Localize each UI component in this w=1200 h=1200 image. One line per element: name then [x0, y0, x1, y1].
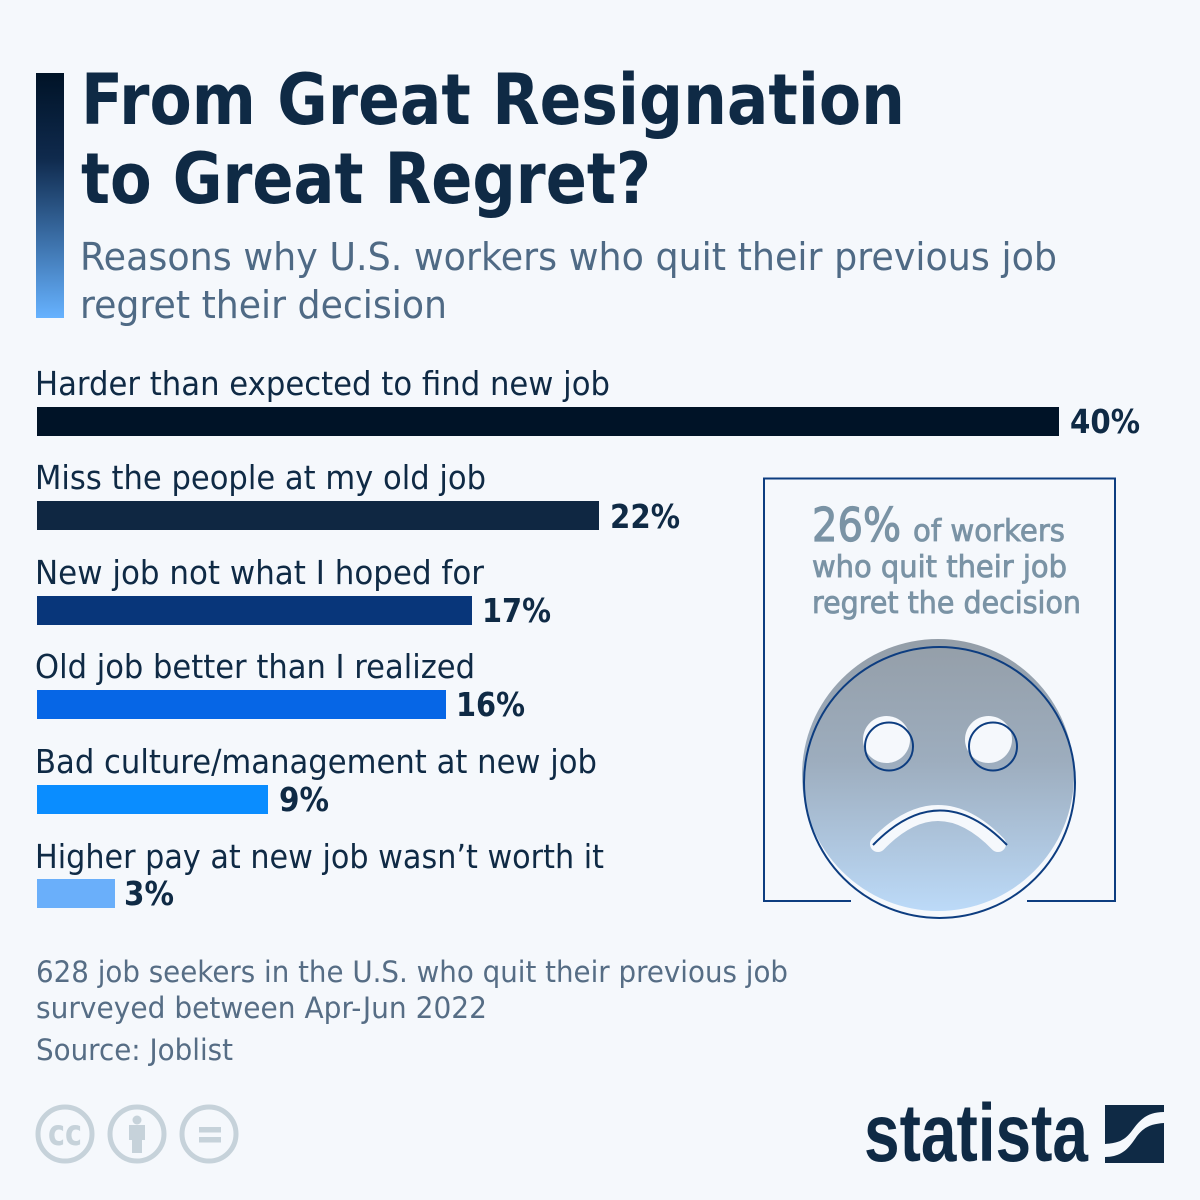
row: bad culture: 9%	[279, 780, 329, 819]
icon: cc license	[38, 1107, 92, 1161]
row: new job not what hoped: 17%	[482, 591, 551, 630]
row: higher pay: 3%	[124, 874, 174, 913]
callout text: who quit their job	[812, 550, 1067, 585]
title: to Great Regret?	[81, 138, 651, 220]
callout panel	[764, 478, 1115, 918]
row: new job not what hoped: New job not what I hoped for	[35, 554, 485, 592]
callout text: 26%	[812, 498, 901, 552]
row: miss the people	[35, 459, 680, 536]
accent bar	[36, 73, 64, 318]
row: higher pay	[35, 838, 604, 913]
row: miss the people: 22%	[610, 497, 680, 536]
logo mark	[1105, 1105, 1164, 1163]
logo wordmark: statista	[864, 1088, 1089, 1179]
icon: sad face	[802, 639, 1075, 918]
subtitle: regret their decision	[80, 283, 447, 327]
callout text: of workers	[913, 514, 1065, 549]
row: new job not what hoped	[35, 554, 551, 630]
row: old job better: Old job better than I realized	[35, 648, 475, 686]
title	[81, 59, 905, 220]
icon: attribution	[110, 1107, 164, 1161]
bar chart	[35, 365, 1140, 913]
footnote: 628 job seekers in the U.S. who quit their previous job	[36, 955, 788, 989]
row: bad culture: Bad culture/management at new job	[35, 743, 597, 781]
row: miss the people: Miss the people at my old job	[35, 459, 486, 497]
footnote: Source: Joblist	[36, 1033, 233, 1067]
icon: no derivatives	[182, 1107, 236, 1161]
row: harder than expected: Harder than expected to find new job	[35, 365, 610, 403]
subtitle	[80, 235, 1057, 327]
row: old job better	[35, 648, 525, 724]
footnote	[36, 955, 788, 1067]
callout frame	[764, 478, 1115, 901]
statista logo	[864, 1088, 1164, 1179]
row: old job better: 16%	[456, 685, 525, 724]
title: From Great Resignation	[81, 59, 905, 141]
row: higher pay: Higher pay at new job wasn’t worth it	[35, 838, 604, 876]
icon: cc license: cc	[48, 1113, 82, 1154]
row: harder than expected: 40%	[1070, 402, 1140, 441]
row: harder than expected	[35, 365, 1140, 441]
footnote: surveyed between Apr-Jun 2022	[36, 991, 487, 1025]
callout text: regret the decision	[812, 586, 1081, 621]
callout text	[812, 498, 1081, 621]
subtitle: Reasons why U.S. workers who quit their previous job	[80, 235, 1057, 279]
row: bad culture	[35, 743, 597, 819]
